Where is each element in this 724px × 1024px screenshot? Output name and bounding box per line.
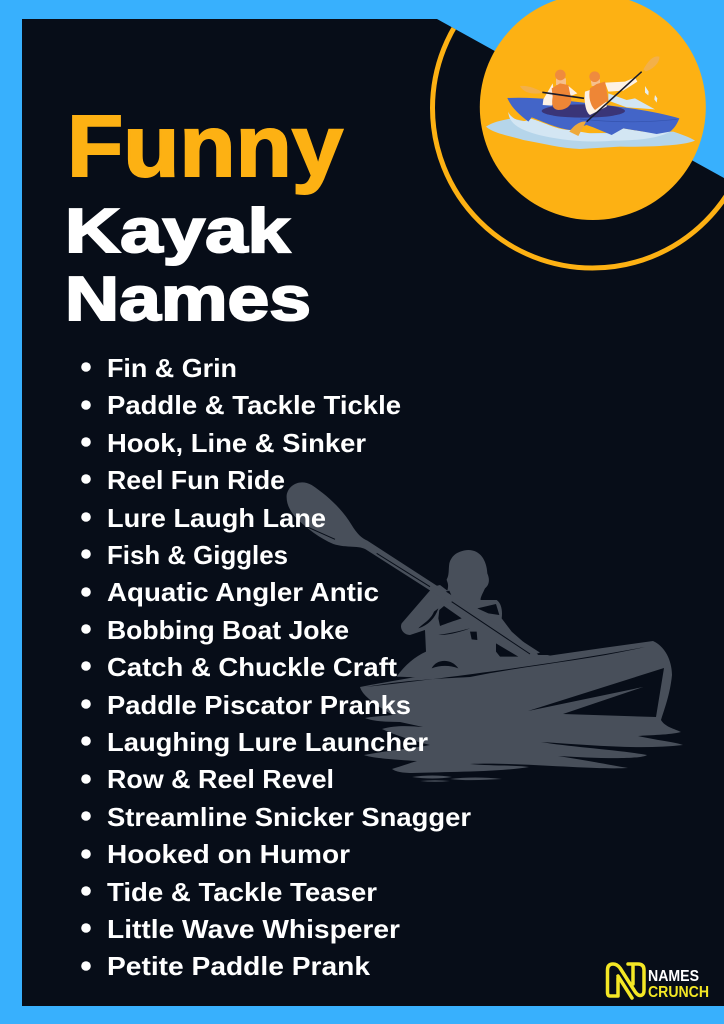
logo: Names Crunch bbox=[608, 964, 709, 1001]
silhouette dark cutouts bbox=[365, 647, 664, 717]
names: Laughing Lure Launcher bbox=[107, 727, 428, 757]
names: Hooked on Humor bbox=[107, 839, 350, 869]
front paddler bbox=[585, 71, 637, 115]
silhouette paddler bbox=[397, 550, 550, 680]
names: Catch & Chuckle Craft bbox=[107, 652, 397, 682]
names: Aquatic Angler Antic bbox=[107, 577, 379, 607]
title: Names: Names bbox=[65, 265, 311, 334]
front paddle bbox=[587, 72, 642, 122]
logo icon bbox=[608, 964, 644, 998]
names: Hook, Line & Sinker bbox=[107, 428, 366, 458]
boat cockpit bbox=[542, 104, 625, 118]
rear paddler bbox=[543, 70, 577, 110]
names: Row & Reel Revel bbox=[107, 764, 334, 794]
logo text: CRUNCH: CRUNCH bbox=[648, 984, 709, 1001]
names bbox=[107, 353, 471, 981]
silhouette hull and water bbox=[360, 641, 683, 773]
title: Kayak: Kayak bbox=[65, 197, 291, 266]
decorative ring bbox=[432, 0, 724, 268]
icon: kayakers illustration bbox=[486, 56, 695, 149]
names: Streamline Snicker Snagger bbox=[107, 802, 471, 832]
names: Paddle Piscator Pranks bbox=[107, 690, 411, 720]
names: Fin & Grin bbox=[107, 353, 237, 383]
rear waves bbox=[608, 93, 655, 109]
names: Bobbing Boat Joke bbox=[107, 615, 349, 645]
names: Petite Paddle Prank bbox=[107, 951, 371, 981]
water splash bbox=[486, 118, 695, 149]
list of kayak names bbox=[81, 353, 471, 981]
splash drops bbox=[645, 86, 657, 103]
names: Paddle & Tackle Tickle bbox=[107, 390, 401, 420]
title: Funny: Funny bbox=[67, 98, 343, 195]
names: Lure Laugh Lane bbox=[107, 503, 326, 533]
silhouette small streaks bbox=[412, 776, 502, 782]
yellow circle bbox=[480, 0, 706, 220]
kayak silhouette bbox=[287, 482, 683, 782]
bullets bbox=[81, 362, 91, 971]
names: Tide & Tackle Teaser bbox=[107, 877, 377, 907]
names: Reel Fun Ride bbox=[107, 465, 285, 495]
rear paddle bbox=[520, 86, 543, 94]
logo text: NAMES: NAMES bbox=[648, 968, 699, 985]
boat hull bbox=[507, 98, 679, 135]
names: Fish & Giggles bbox=[107, 540, 288, 570]
names: Little Wave Whisperer bbox=[107, 914, 400, 944]
silhouette paddle bbox=[287, 482, 540, 655]
